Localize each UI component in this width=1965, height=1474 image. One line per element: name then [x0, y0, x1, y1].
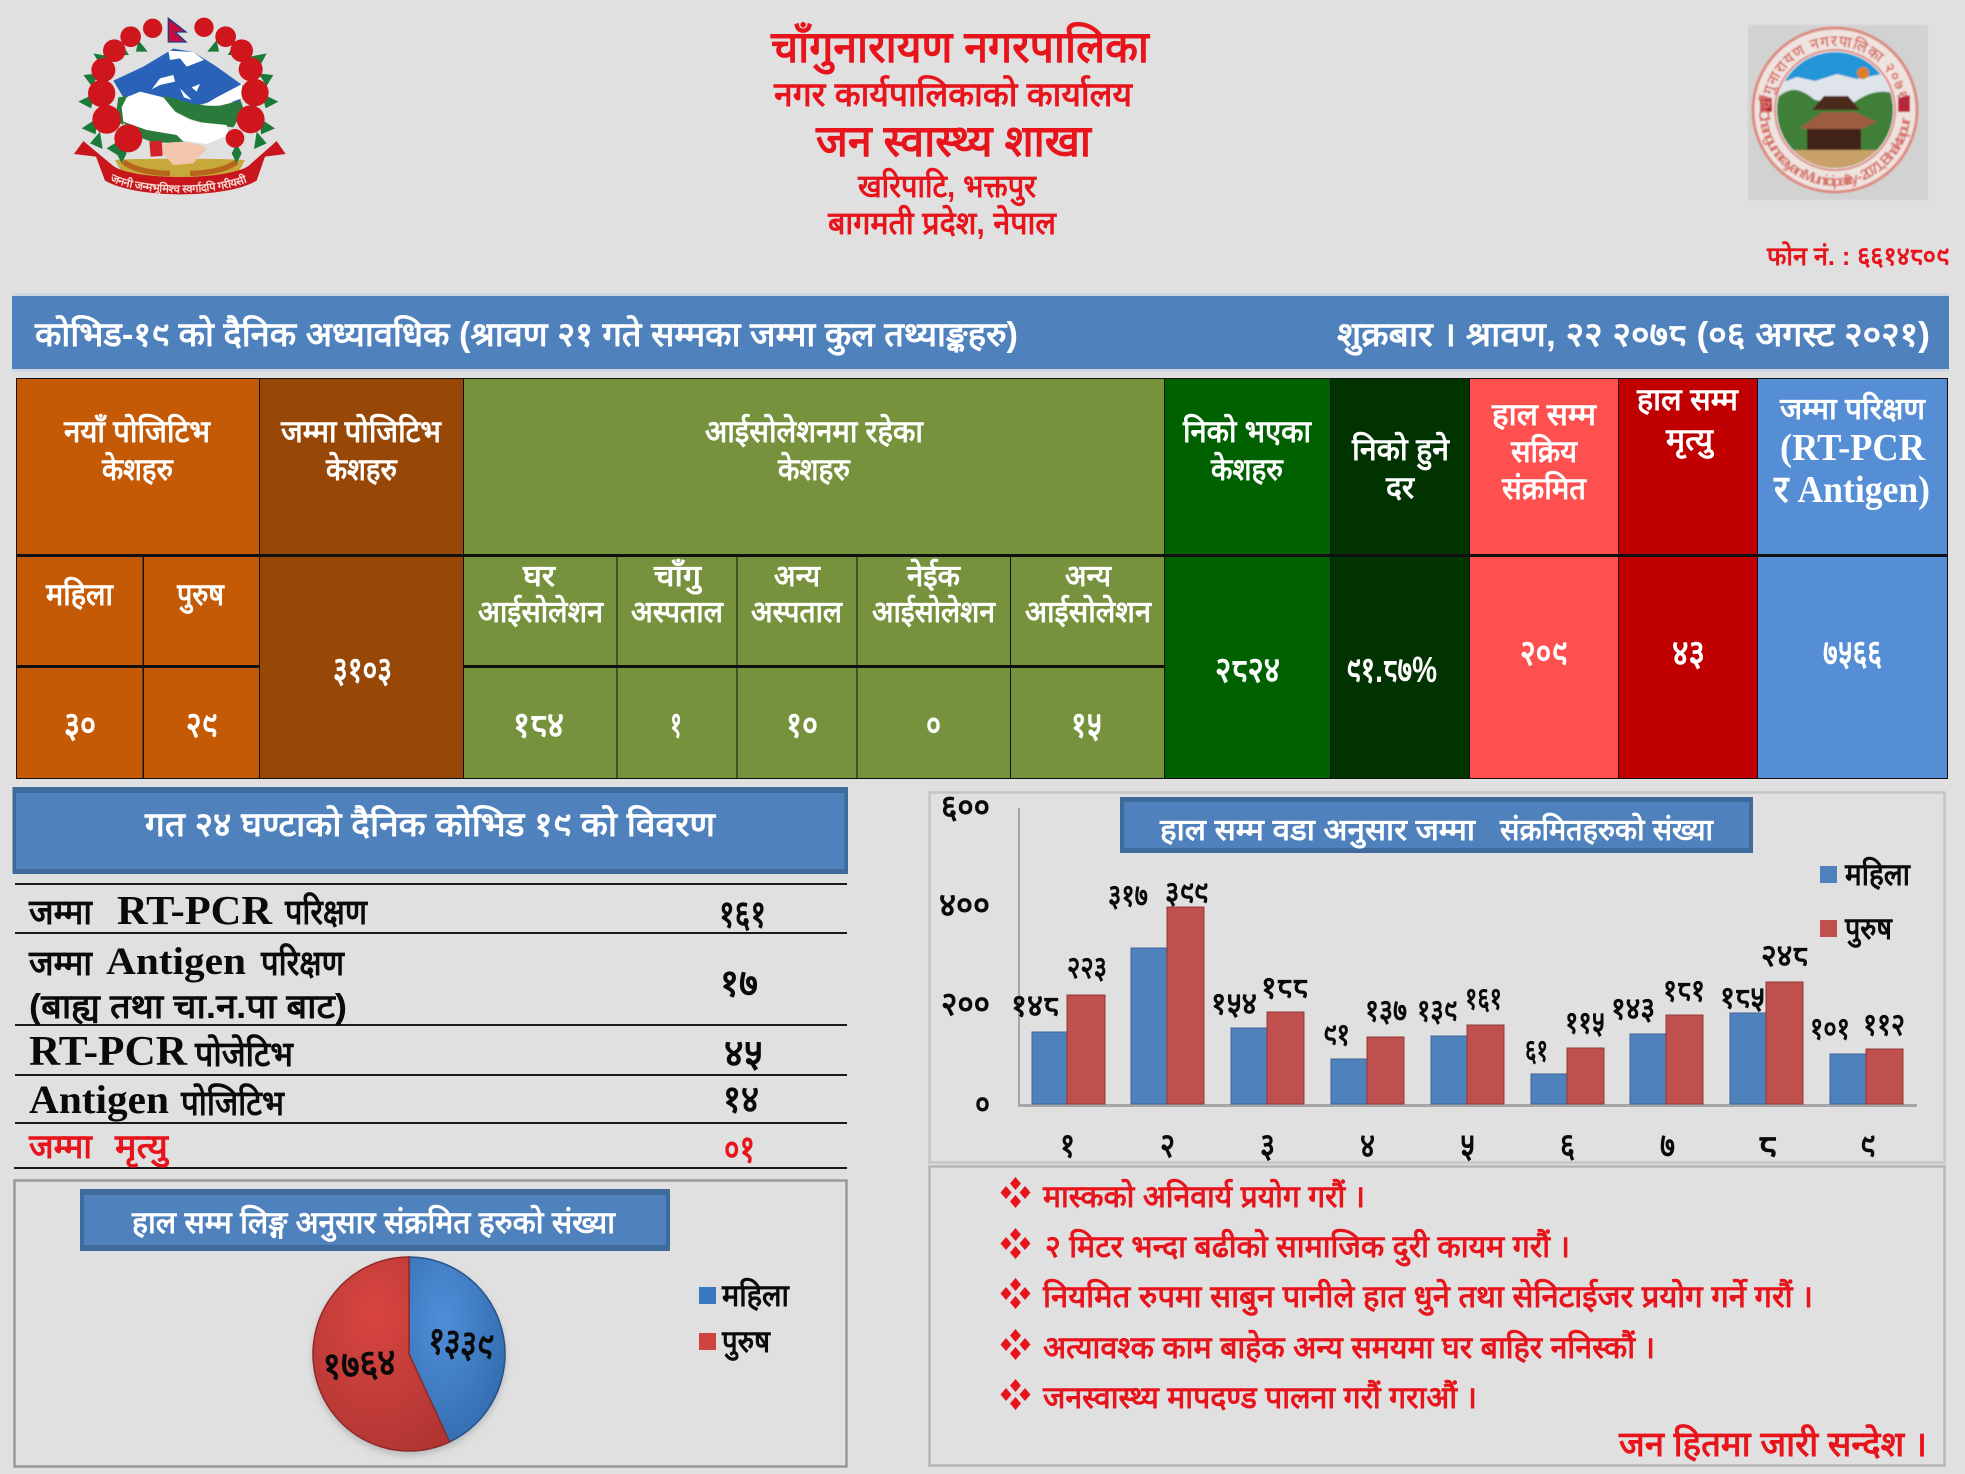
- heading: infected by ward: संक्रमितहरुको संख्या: [1499, 812, 1714, 847]
- heading: last 24 hours: गत २४ घण्टाको दैनिक कोभिड १९ को विवरण: [144, 804, 716, 844]
- legend: महिला: [721, 1277, 790, 1313]
- column group: isolation cases: चाँगु: [653, 558, 702, 595]
- y axis labels: ४००: [939, 886, 990, 923]
- column: total tests: (RT-PCR: [1780, 427, 1926, 469]
- table: 24-hour details: १४: [723, 1079, 759, 1121]
- column: active infected: २०९: [1520, 632, 1567, 673]
- data labels: १६१: [1465, 981, 1502, 1016]
- column group: isolation cases: आईसोलेशन: [872, 594, 996, 629]
- column group: isolation cases: आईसोलेशन: [478, 594, 604, 629]
- table: 24-hour details: पोजेटिभ: [194, 1034, 294, 1074]
- data labels: १५४: [1211, 986, 1257, 1021]
- column: total positive cases: जम्मा पोजिटिभ: [280, 413, 442, 449]
- data labels: १३७: [1365, 993, 1407, 1028]
- data labels: ३१७: [1108, 878, 1148, 913]
- message list: २ मिटर भन्दा बढीको सामाजिक दुरी कायम गरौं ।: [1045, 1228, 1570, 1267]
- column group: isolation cases: आईसोलेशनमा रहेका: [705, 413, 924, 449]
- data labels: ११५: [1565, 1005, 1605, 1040]
- heading: infected by gender: [80, 1189, 670, 1251]
- column: deaths to date: ४३: [1672, 632, 1705, 673]
- table: 24-hour details: परिक्षण: [260, 943, 345, 983]
- table: 24-hour details: RT-PCR: [29, 1029, 188, 1075]
- table: 24-hour details: जम्मा: [28, 944, 94, 983]
- data labels: १८८: [1261, 970, 1308, 1005]
- message list: नियमित रुपमा साबुन पानीले हात धुने तथा सेनिटाईजर प्रयोग गर्ने गरौं ।: [1042, 1278, 1813, 1316]
- column: new positive cases: [17, 379, 259, 778]
- x axis labels: ६: [1560, 1127, 1575, 1165]
- column group: isolation cases: घर: [522, 560, 557, 593]
- banner: daily update: कोभिड-१९ को दैनिक अध्यावधिक (श्रावण २१ गते सम्मका जम्मा कुल तथ्याङ्कहरु): [34, 314, 1018, 356]
- column: total tests: ७५६६: [1823, 632, 1882, 673]
- phone number: फोन नं. : ६६१४८०९: [1766, 241, 1949, 271]
- message list: जनस्वास्थ्य मापदण्ड पालना गरौं गराऔं ।: [1042, 1379, 1477, 1415]
- x axis labels: ७: [1660, 1127, 1675, 1165]
- column group: isolation cases: १०: [786, 704, 818, 745]
- legend: [1820, 856, 1911, 948]
- column group: isolation cases: [464, 379, 1164, 778]
- data labels: २४८: [1761, 938, 1808, 973]
- message list: अत्यावश्क काम बाहेक अन्य समयमा घर बाहिर ननिस्कौं ।: [1043, 1329, 1655, 1365]
- axes: [1018, 808, 1917, 1107]
- column: deaths to date: हाल सम्म: [1636, 382, 1739, 417]
- column: recovered cases: निको भएका: [1182, 413, 1312, 449]
- column: recovery rate: [1331, 379, 1469, 778]
- column: active infected: हाल सम्म: [1491, 397, 1597, 432]
- column: new positive cases: महिला: [45, 576, 114, 612]
- column: new positive cases: २९: [186, 704, 217, 745]
- table: 24-hour details: १६१: [719, 894, 766, 936]
- data labels: १३९: [1417, 993, 1457, 1028]
- column: recovery rate: ९१.८७%: [1346, 649, 1437, 690]
- title block: municipality header: खरिपाटि, भक्तपुर: [857, 167, 1038, 207]
- column group: isolation cases: आईसोलेशन: [1025, 594, 1152, 629]
- column: new positive cases: पुरुष: [176, 577, 225, 614]
- data labels: १४८: [1011, 988, 1059, 1023]
- icon: diamond bullets: [1000, 1177, 1030, 1410]
- pie chart: १७६४: [322, 1342, 397, 1389]
- banner: daily update: शुक्रबार । श्रावण, २२ २०७८ (०६ अगस्ट २०२१): [1337, 316, 1930, 356]
- icon: Changunarayan municipality seal: चाँगुनारायण नगरपालिका २०७१: [1758, 36, 1908, 110]
- y axis labels: ०: [975, 1085, 990, 1122]
- x axis labels: ५: [1460, 1127, 1475, 1165]
- x axis labels: ८: [1758, 1127, 1777, 1165]
- x axis labels: [1060, 1127, 1875, 1165]
- panel: gender pie chart: [14, 1180, 846, 1466]
- column: recovery rate: दर: [1385, 470, 1415, 505]
- column group: isolation cases: अस्पताल: [631, 596, 725, 629]
- message list: मास्कको अनिवार्य प्रयोग गरौं ।: [1042, 1178, 1365, 1214]
- banner: daily update: [12, 293, 1949, 372]
- x axis labels: १: [1060, 1127, 1075, 1165]
- heading: infected by ward: [1120, 797, 1753, 853]
- table: 24-hour details: जम्मा: [28, 893, 94, 932]
- data labels: १०१: [1810, 1011, 1850, 1046]
- x axis labels: ४: [1360, 1127, 1375, 1165]
- column group: isolation cases: अन्य: [1065, 560, 1112, 593]
- x axis labels: ९: [1860, 1127, 1875, 1165]
- title block: municipality header: बागमती प्रदेश, नेपाल: [827, 204, 1057, 241]
- column: total tests: र Antigen): [1773, 469, 1930, 511]
- legend: महिला: [1844, 856, 1911, 892]
- pie chart: [313, 1257, 505, 1455]
- column: total positive cases: केशहरु: [325, 451, 398, 487]
- heading: last 24 hours: [12, 787, 848, 874]
- column: recovered cases: केशहरु: [1210, 451, 1284, 487]
- title block: municipality header: चाँगुनारायण नगरपालिका: [770, 21, 1151, 75]
- y axis labels: [939, 788, 990, 1122]
- column group: isolation cases: १: [670, 704, 682, 745]
- icon: Nepal national emblem: [74, 17, 286, 196]
- data labels: २२३: [1067, 950, 1107, 985]
- column group: isolation cases: केशहरु: [777, 451, 851, 487]
- data labels: १८५: [1720, 980, 1765, 1015]
- y axis labels: २००: [941, 985, 990, 1022]
- column group: isolation cases: ०: [926, 704, 941, 745]
- x axis labels: ३: [1260, 1127, 1275, 1165]
- column: total tests: जम्मा परिक्षण: [1779, 391, 1926, 426]
- column: new positive cases: ३०: [64, 704, 96, 745]
- statistics table: [16, 378, 1948, 779]
- column group: isolation cases: अस्पताल: [751, 596, 844, 629]
- table: 24-hour details: Antigen: [106, 940, 246, 983]
- column: recovery rate: निको हुने: [1351, 431, 1451, 471]
- column: active infected: [1470, 379, 1618, 778]
- legend: [699, 1277, 790, 1361]
- table: 24-hour details: पोजिटिभ: [180, 1083, 285, 1123]
- column group: isolation cases: १८४: [513, 704, 564, 745]
- table: 24-hour details: ४५: [724, 1033, 763, 1075]
- column group: isolation cases: अन्य: [774, 560, 821, 593]
- data labels: ११२: [1863, 1007, 1905, 1042]
- column: total positive cases: ३१०३: [333, 649, 392, 690]
- data labels: १८१: [1663, 973, 1705, 1008]
- table: 24-hour details: मृत्यु: [114, 1128, 170, 1168]
- column group: isolation cases: १५: [1071, 704, 1102, 745]
- title block: municipality header: जन स्वास्थ्य शाखा: [815, 117, 1093, 166]
- message list: [1042, 1178, 1813, 1415]
- table: 24-hour details: १७: [720, 963, 758, 1005]
- title block: municipality header: नगर कार्यपालिकाको कार्यालय: [773, 74, 1133, 114]
- column: new positive cases: केशहरु: [101, 451, 174, 487]
- data labels: ३९९: [1165, 875, 1208, 910]
- icon: Nepal national emblem: जननी जन्मभूमिश्च स्वर्गादपि गरीयसी: [112, 174, 247, 196]
- column: new positive cases: नयाँ पोजिटिभ: [63, 413, 211, 449]
- icon: Changunarayan municipality seal: Changunarayan Municipality - 2071, Bhaktapur: [1758, 110, 1911, 190]
- table: 24-hour details: [14, 883, 847, 1171]
- table: 24-hour details: Antigen: [29, 1077, 169, 1122]
- table: 24-hour details: ०१: [724, 1129, 755, 1171]
- pie chart: १३३९: [426, 1320, 495, 1368]
- column: total tests: [1758, 379, 1947, 778]
- x axis labels: २: [1160, 1127, 1175, 1165]
- table: 24-hour details: (बाह्य तथा चा.न.पा बाट): [29, 988, 347, 1026]
- data labels: ६१: [1525, 1033, 1548, 1068]
- sign-off message: जन हितमा जारी सन्देश ।: [1618, 1424, 1927, 1464]
- data labels: [1011, 875, 1905, 1068]
- legend: पुरुष: [1844, 911, 1893, 948]
- data labels: १४३: [1611, 991, 1655, 1026]
- column: active infected: सक्रिय: [1510, 433, 1578, 469]
- table: 24-hour details: जम्मा: [28, 1128, 93, 1166]
- column: active infected: संक्रमित: [1501, 470, 1587, 506]
- column: deaths to date: मृत्यु: [1665, 422, 1715, 459]
- column: total positive cases: [260, 379, 463, 778]
- title block: municipality header: [770, 21, 1151, 241]
- column: recovered cases: [1165, 379, 1330, 778]
- data labels: ९१: [1323, 1017, 1350, 1052]
- heading: infected by gender: हाल सम्म लिङ्ग अनुसार संक्रमित हरुको संख्या: [131, 1204, 616, 1242]
- column: recovered cases: २८२४: [1215, 649, 1280, 690]
- column: deaths to date: [1619, 379, 1757, 778]
- legend: पुरुष: [721, 1324, 771, 1361]
- column group: isolation cases: नेईक: [906, 558, 961, 593]
- bars: [1032, 907, 1903, 1104]
- table: 24-hour details: परिक्षण: [284, 892, 368, 932]
- table: 24-hour details: RT-PCR: [117, 887, 272, 933]
- heading: infected by ward: हाल सम्म वडा अनुसार जम्मा: [1159, 814, 1476, 849]
- icon: Changunarayan municipality seal: [1748, 25, 1928, 200]
- panel: ward bar chart: [930, 788, 1944, 1165]
- y axis labels: ६००: [941, 788, 990, 825]
- panel: public health messages: [930, 1166, 1944, 1466]
